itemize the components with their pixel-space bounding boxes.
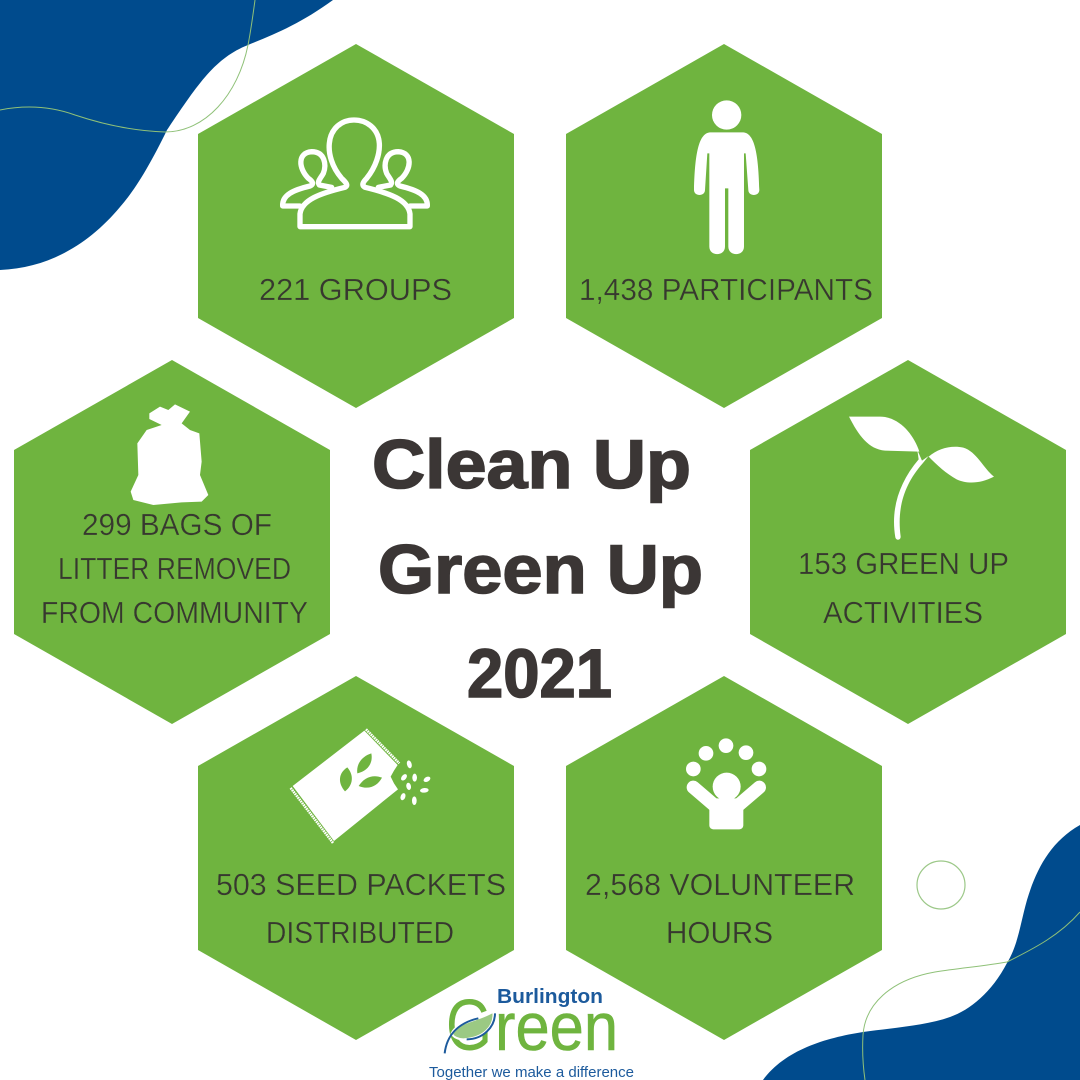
label: litter bags: 299 BAGS OF xyxy=(82,507,272,542)
label: volunteer hours xyxy=(585,867,855,950)
hexagon: volunteer hours xyxy=(566,676,882,1040)
logo: Burlington Green: Burlington xyxy=(497,986,603,1008)
label: seed packets: 503 SEED PACKETS xyxy=(216,867,506,902)
label: seed packets xyxy=(216,867,506,950)
label: green up activities: ACTIVITIES xyxy=(823,595,983,630)
label: litter bags xyxy=(41,507,308,630)
label: seed packets: DISTRIBUTED xyxy=(266,915,454,950)
label: groups: 221 GROUPS xyxy=(259,272,452,307)
hexagon: groups xyxy=(198,44,514,408)
title: Green Up xyxy=(378,531,703,608)
icon: sprout xyxy=(849,417,994,540)
label: litter bags: FROM COMMUNITY xyxy=(41,595,308,630)
logo: Burlington Green xyxy=(429,986,634,1080)
title xyxy=(372,426,703,712)
label: volunteer hours: HOURS xyxy=(666,915,773,950)
hexagon: participants xyxy=(566,44,882,408)
title: 2021 xyxy=(467,635,612,712)
decorative circle xyxy=(917,861,965,909)
icon: garbage bag xyxy=(131,404,208,505)
logo: Burlington Green: reen xyxy=(495,989,618,1065)
top-left thin line xyxy=(0,0,255,132)
icon: group of people xyxy=(283,120,427,227)
icon: volunteer with raised arms xyxy=(686,738,766,829)
icon: seed packet xyxy=(291,729,431,843)
label: green up activities xyxy=(798,546,1009,630)
bottom-right thin line xyxy=(863,912,1080,1080)
label: green up activities: 153 GREEN UP xyxy=(798,546,1009,581)
bottom-right blue wave xyxy=(763,825,1080,1080)
title: Clean Up xyxy=(372,426,691,503)
label: volunteer hours: 2,568 VOLUNTEER xyxy=(585,867,855,902)
label: litter bags: LITTER REMOVED xyxy=(58,551,291,586)
hexagon: seed packets xyxy=(198,676,514,1040)
hexagon: litter bags xyxy=(14,360,330,724)
hexagon: green up activities xyxy=(750,360,1066,724)
label: participants: 1,438 PARTICIPANTS xyxy=(579,272,873,307)
logo leaf xyxy=(445,1012,495,1053)
icon: person xyxy=(694,100,759,254)
logo: Burlington Green: G xyxy=(446,986,492,1066)
top-left blue wave xyxy=(0,0,333,270)
